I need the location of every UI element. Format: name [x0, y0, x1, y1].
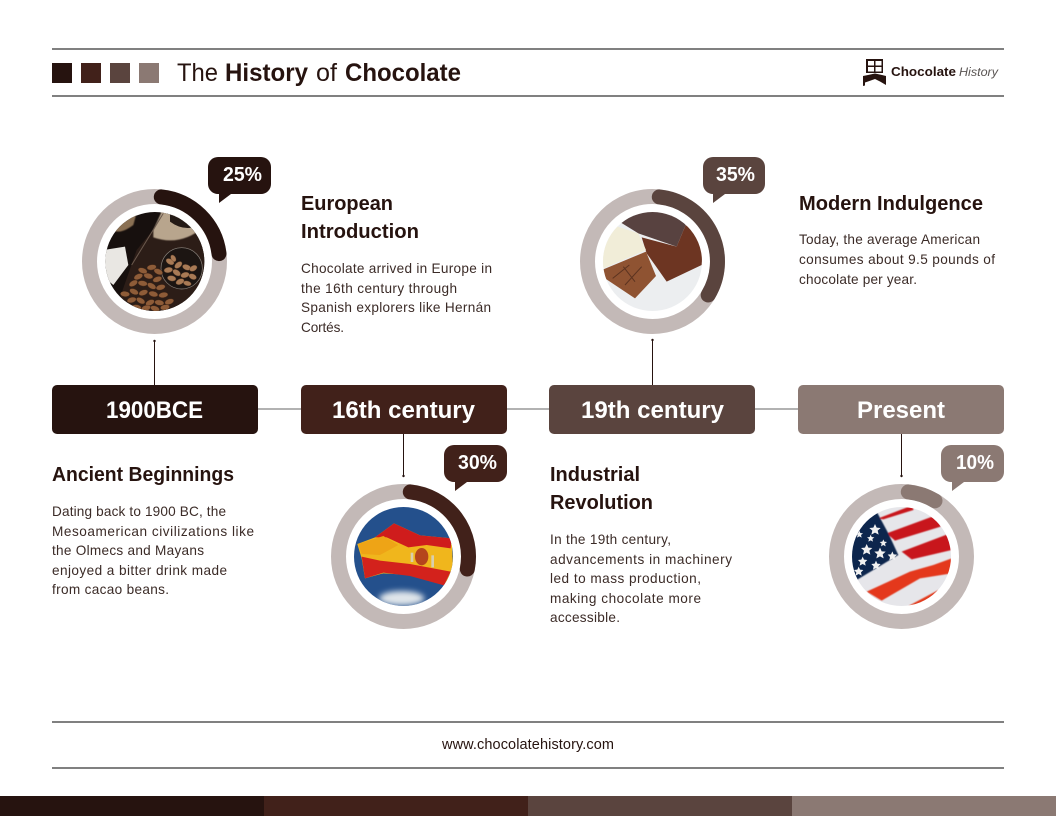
heading: European Introduction [301, 193, 419, 243]
bubble: 10% [941, 445, 1004, 491]
text: Industrial Revolution: making chocolate more [550, 591, 701, 606]
heading: European Introduction: European [301, 193, 393, 215]
photo: chocolate bars [600, 210, 705, 313]
bubble: 30%: 30% [458, 452, 497, 474]
leader lines [153, 339, 903, 477]
timeline box: 1900BCE [52, 385, 258, 434]
progress ring: 25% [90, 196, 220, 326]
photo: Spanish flag [353, 507, 454, 607]
title [177, 59, 461, 87]
bottom colour band [0, 796, 1056, 816]
text: European Introduction: Cortés. [301, 320, 344, 335]
bubble: 35%: 35% [716, 164, 755, 186]
text: Ancient Beginnings: from cacao beans. [52, 582, 169, 597]
text: Modern Indulgence: consumes about 9.5 pounds of [799, 252, 995, 267]
logo wordmark: History [959, 65, 999, 79]
bubble: 25% [208, 157, 271, 203]
text: Ancient Beginnings: enjoyed a bitter drink made [52, 563, 227, 578]
timeline box: Present [798, 385, 1004, 434]
text: Modern Indulgence [799, 232, 995, 287]
text: Industrial Revolution: advancements in machinery [550, 552, 732, 567]
timeline box: 1900BCE: 1900BCE [106, 397, 203, 424]
title: of [316, 59, 337, 87]
progress ring: 30% [338, 492, 469, 622]
footer: www.chocolatehistory.com [441, 737, 614, 753]
text: Ancient Beginnings: Dating back to 1900 BC, the [52, 504, 226, 519]
text: Industrial Revolution: led to mass production, [550, 571, 701, 586]
timeline connector [258, 408, 798, 410]
text: European Introduction [301, 261, 492, 335]
heading: Industrial Revolution [550, 464, 653, 514]
text: European Introduction: Chocolate arrived in Europe in [301, 261, 492, 276]
title: History [225, 59, 308, 87]
logo wordmark: Chocolate [891, 64, 956, 79]
text: Ancient Beginnings: the Olmecs and Mayans [52, 543, 204, 558]
photo: cacao beans [105, 212, 204, 311]
icon: logo building [863, 59, 886, 86]
text: Ancient Beginnings [52, 504, 254, 597]
heading: Modern Indulgence: Modern Indulgence [799, 193, 983, 215]
bubble: 30% [444, 445, 507, 491]
timeline box: 19th century [549, 385, 755, 434]
timeline box: 16th century: 16th century [332, 397, 476, 424]
timeline box: 16th century [301, 385, 507, 434]
title: The [177, 59, 218, 87]
text: European Introduction: Spanish explorers like Hernán [301, 300, 491, 315]
heading: European Introduction: Introduction [301, 221, 419, 243]
progress ring: 35% [588, 196, 718, 326]
text: Ancient Beginnings: Mesoamerican civilizations like [52, 524, 254, 539]
timeline box: Present: Present [857, 397, 945, 424]
colour squares [52, 63, 159, 83]
text: European Introduction: the 16th century through [301, 281, 457, 296]
bubble: 35% [703, 157, 765, 203]
heading: Industrial Revolution: Industrial [550, 464, 640, 486]
photo: American flag [848, 505, 953, 608]
bubble: 10%: 10% [956, 452, 994, 474]
text: Modern Indulgence: Today, the average American [799, 232, 980, 247]
timeline box: 19th century: 19th century [581, 397, 725, 424]
bubble: 25%: 25% [223, 164, 262, 186]
heading: Ancient Beginnings: Ancient Beginnings [52, 464, 234, 486]
title: Chocolate [345, 59, 461, 87]
logo wordmark [891, 64, 999, 79]
text: Industrial Revolution: accessible. [550, 610, 620, 625]
text: Industrial Revolution [550, 532, 732, 625]
header [52, 49, 1004, 96]
heading: Industrial Revolution: Revolution [550, 492, 653, 514]
progress ring: 10% [836, 492, 966, 622]
text: Industrial Revolution: In the 19th century, [550, 532, 671, 547]
text: Modern Indulgence: chocolate per year. [799, 272, 917, 287]
